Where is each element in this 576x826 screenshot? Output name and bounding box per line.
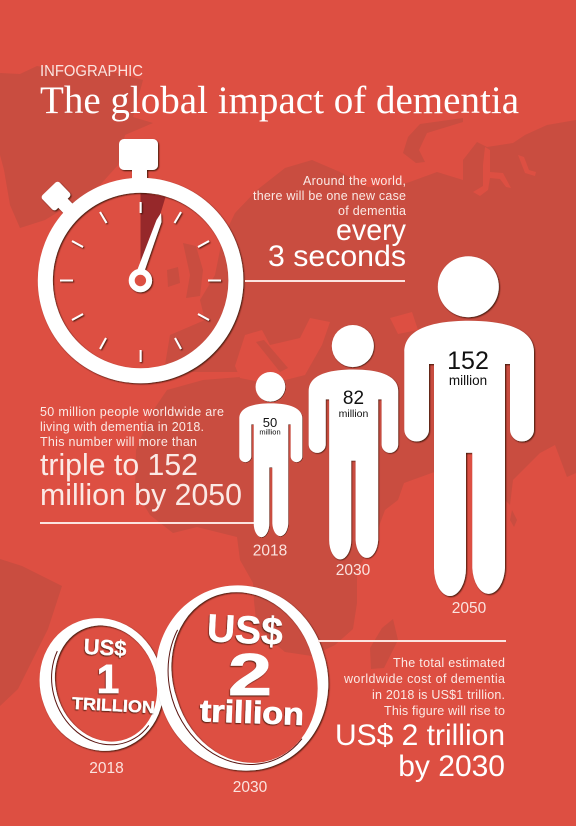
stopwatch icon	[40, 139, 236, 376]
figure: 2030 person	[309, 325, 398, 579]
text block: worldwide cost: worldwide cost of dementia	[343, 672, 505, 686]
clock hand	[132, 213, 162, 289]
figure: 2050 person: million	[449, 373, 487, 388]
text block: triple to 152 million: million by 2050	[40, 477, 242, 512]
text block: worldwide cost: The total estimated	[393, 656, 505, 670]
title: The global impact of dementia	[40, 79, 519, 122]
side button	[40, 180, 81, 222]
coin: US$ 2 trillion 2030	[156, 585, 328, 771]
tick marks	[60, 202, 221, 362]
figure: 2018 person	[239, 372, 302, 560]
text block: triple to 152 million: 50 million people worldwide are	[40, 405, 224, 419]
text block: new case every 3 seconds: there will be one new case	[253, 189, 406, 203]
text block: worldwide cost: This figure will rise to	[384, 704, 505, 718]
coin 1 unit: TRILLION	[72, 694, 155, 717]
coin edge line	[52, 651, 149, 745]
divider: text to 2018 figure	[40, 522, 256, 524]
text block: worldwide cost: US$ 2 trillion	[335, 719, 505, 752]
figure: 2018 person: 2018	[253, 542, 287, 560]
figure: 2030 person: million	[339, 408, 369, 420]
coin: US$ 1 trillion 2018	[40, 618, 163, 751]
figure: 2018 person: 50	[263, 415, 277, 430]
world map	[0, 66, 576, 706]
label: coin year 2030: 2030	[233, 779, 268, 796]
figure: 2018 person: million	[259, 428, 281, 436]
elapsed time wedge	[140, 192, 166, 280]
text block: new case every 3 seconds	[253, 174, 406, 273]
Italy	[256, 340, 288, 372]
figure: 2050 person	[404, 256, 534, 617]
text block: triple to 152 million: triple to 152	[40, 447, 198, 482]
text block: new case every 3 seconds: every	[336, 214, 406, 247]
divider: clock to text	[245, 280, 405, 282]
watch ring	[45, 185, 236, 376]
text block: triple to 152 million: This number will more than	[40, 435, 197, 449]
coin edge line	[168, 630, 302, 764]
label: coin year 2018: 2018	[89, 760, 124, 777]
text block: new case every 3 seconds: 3 seconds	[268, 240, 406, 273]
divider: coin to text	[318, 640, 506, 642]
heading: infographic label: INFOGRAPHIC	[40, 63, 143, 80]
figure: 2030 person: 2030	[336, 562, 371, 579]
figure: 2050 person: 152	[447, 347, 489, 375]
coin 2 currency: US$	[206, 607, 284, 654]
coin 2 amount: 2	[228, 642, 272, 708]
text block: triple to 152 million	[40, 405, 242, 512]
coin 1 amount: 1	[97, 656, 119, 702]
text block: worldwide cost: in 2018 is US$1 trillion.	[372, 688, 505, 702]
figure: 2030 person: 82	[343, 388, 364, 409]
figure: 2050 person: 2050	[452, 600, 487, 617]
coin 1 currency: US$	[83, 634, 127, 661]
text block: worldwide cost	[335, 656, 505, 783]
seas and river highlights	[235, 147, 536, 384]
top crown button	[119, 139, 158, 182]
text block: new case every 3 seconds: Around the world,	[303, 174, 406, 188]
coin 2 unit: trillion	[199, 693, 305, 732]
text block: worldwide cost: by 2030	[398, 750, 505, 783]
text block: triple to 152 million: living with dementia in 2018.	[40, 420, 204, 434]
text block: new case every 3 seconds: of dementia	[338, 204, 406, 218]
